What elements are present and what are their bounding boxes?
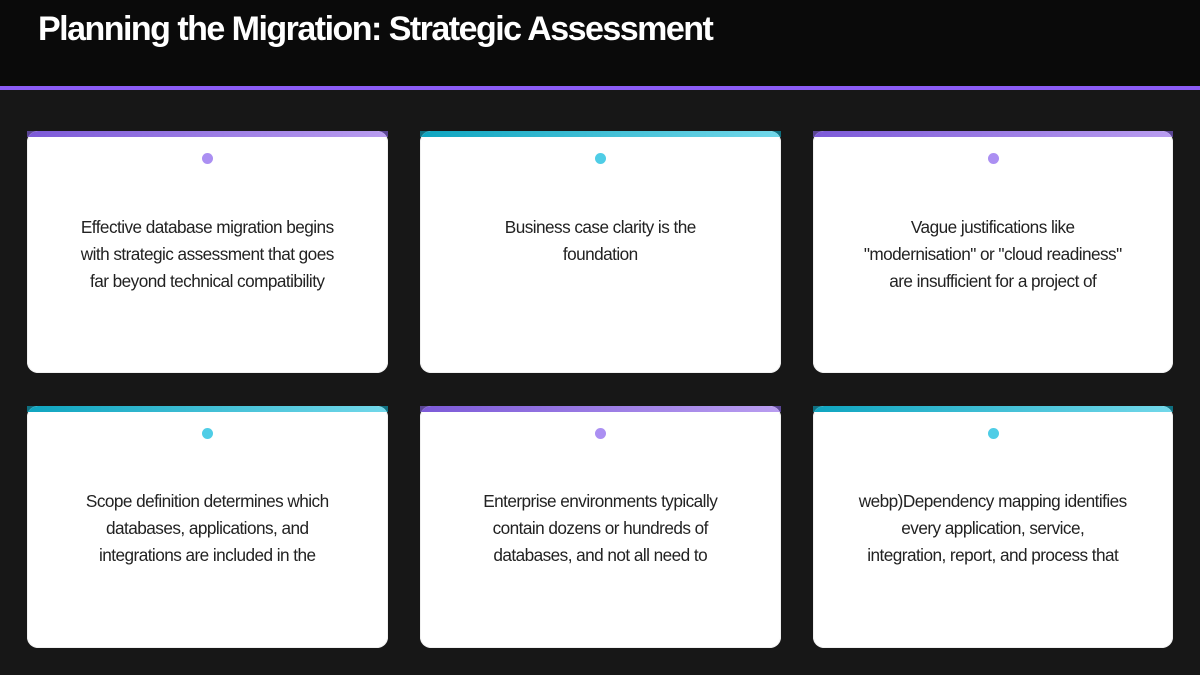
panel 6 dot: [988, 428, 998, 438]
panel 6 corner backing: [812, 406, 1173, 412]
panel 2 text: foundation: [563, 244, 638, 264]
panel 6 text: every application, service,: [901, 518, 1084, 538]
panel 5 corner backing: [420, 406, 780, 412]
panel 4 text: databases, applications, and: [106, 518, 308, 538]
title: Planning the Migration: Strategic Assessment: [38, 10, 712, 48]
panel 1 corner backing: [27, 131, 388, 137]
panel 6 top strip: [812, 406, 1173, 412]
panel 6 text: [858, 490, 1127, 564]
panel 5 text: Enterprise environments typically: [483, 490, 717, 510]
panel 6: dependency mapping: [812, 406, 1173, 648]
panel 1 text: with strategic assessment that goes: [81, 244, 334, 264]
panel 4 text: Scope definition determines which: [86, 490, 329, 510]
panel 3 text: are insufficient for a project of: [889, 271, 1096, 291]
panel 1 text: Effective database migration begins: [81, 217, 334, 237]
panel 4 top strip: [27, 406, 388, 412]
panel 6 text: webp)Dependency mapping identifies: [859, 490, 1127, 510]
panel 3 text: [864, 217, 1122, 291]
panel 5 text: contain dozens or hundreds of: [493, 518, 708, 538]
panel 6 text: integration, report, and process that: [867, 544, 1118, 564]
panel 4 text: [86, 490, 329, 564]
panel 1 dot: [202, 153, 213, 164]
panel 2 text: [505, 217, 696, 264]
panel 3 top strip: [812, 131, 1173, 137]
panel 4 dot: [202, 428, 213, 438]
panel 5: enterprise environments: [420, 406, 780, 648]
panel 2 corner backing: [420, 131, 780, 137]
panel 5 text: [483, 490, 718, 564]
panel 2 top strip: [420, 131, 780, 137]
panel 5 text: databases, and not all need to: [493, 544, 707, 564]
panel 1: effective migration: [27, 131, 388, 373]
panel 4 text: integrations are included in the: [99, 544, 316, 564]
panel 1 text: far beyond technical compatibility: [90, 271, 324, 291]
panel 2: business case: [420, 131, 780, 373]
panel 3 text: Vague justifications like: [911, 217, 1075, 237]
panel 2 text: Business case clarity is the: [505, 217, 696, 237]
header band: [0, 0, 1200, 86]
panel 4: scope definition: [27, 406, 388, 648]
panel 5 top strip: [420, 406, 780, 412]
panel 1 top strip: [27, 131, 388, 137]
panel 5 dot: [595, 428, 606, 438]
panel 3: vague justifications: [812, 131, 1173, 373]
panel 3 corner backing: [812, 131, 1173, 137]
header accent rule: [0, 86, 1200, 90]
panel 4 corner backing: [27, 406, 388, 412]
panel 2 dot: [595, 153, 606, 164]
panel 3 dot: [988, 153, 998, 164]
panel 1 text: [80, 217, 334, 291]
panel 3 text: "modernisation" or "cloud readiness": [864, 244, 1122, 264]
